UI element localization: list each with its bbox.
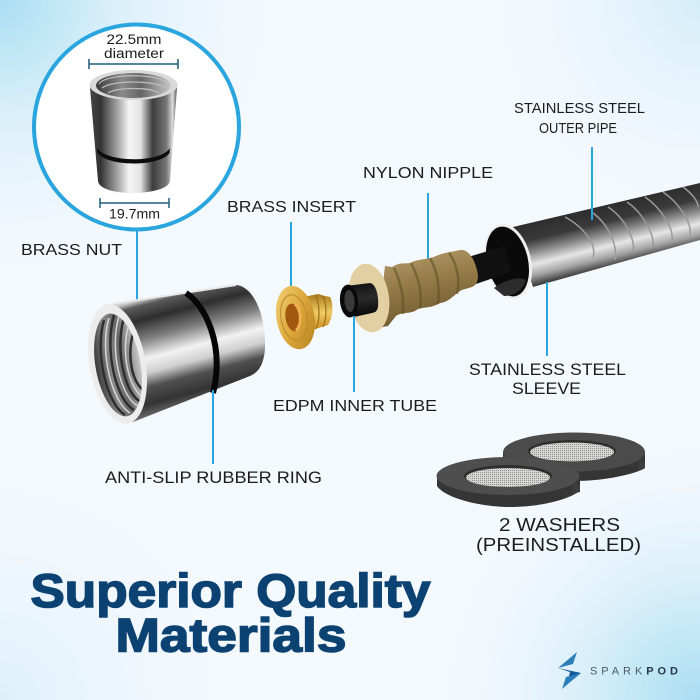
label: stainless steel sleeve: STAINLESS STEEL [469, 360, 626, 379]
dimension line: bottom [100, 198, 169, 208]
connector line: brass insert [290, 222, 292, 296]
connector line: anti-slip rubber ring [212, 390, 214, 464]
label: anti-slip rubber ring: ANTI-SLIP RUBBER RING [105, 468, 322, 487]
connector line: stainless steel sleeve [546, 282, 548, 356]
dimension text: 22.5mm diameter: diameter [104, 46, 165, 61]
dimension line: top [89, 59, 178, 69]
icon: EDPM inner tube end [339, 283, 378, 318]
brand name: SPARK POD [590, 666, 678, 678]
dimension text: 22.5mm diameter: 22.5mm [106, 32, 162, 47]
connector line: brass nut [136, 228, 138, 304]
connector line: outer pipe [591, 147, 593, 220]
icon: small brass nut [90, 70, 178, 193]
icon: brass nut large [79, 285, 265, 428]
connector line: nylon nipple [427, 193, 429, 267]
logo: SparkPod [558, 652, 678, 689]
icon: inner tube [468, 246, 511, 284]
icon: nylon nipple [339, 250, 478, 335]
label: stainless steel sleeve: SLEEVE [512, 379, 581, 398]
washer: front [436, 457, 580, 507]
label: EDPM inner tube: EDPM INNER TUBE [273, 398, 437, 415]
label: nylon nipple: NYLON NIPPLE [363, 165, 493, 182]
label: stainless steel outer pipe: STAINLESS STEEL [514, 101, 645, 117]
icon: spark bolt [558, 652, 581, 689]
icon: stainless steel pipe and sleeve [477, 183, 700, 304]
icon: brass insert [271, 283, 332, 352]
connector line: EDPM inner tube [353, 316, 355, 392]
icon: washers [436, 432, 645, 507]
title: Materials [116, 608, 346, 662]
label: brass nut: BRASS NUT [21, 242, 122, 259]
title: Superior Quality [30, 564, 430, 617]
dimension text: 19.7mm: 19.7mm [109, 206, 160, 222]
label: 2 washers preinstalled: (PREINSTALLED) [476, 534, 641, 555]
washer: back [503, 432, 645, 481]
callout circle: brass nut dimensions [34, 24, 239, 230]
label: brass insert: BRASS INSERT [227, 199, 356, 216]
label: stainless steel outer pipe: OUTER PIPE [539, 121, 617, 137]
label: 2 washers preinstalled: 2 WASHERS [499, 514, 620, 535]
